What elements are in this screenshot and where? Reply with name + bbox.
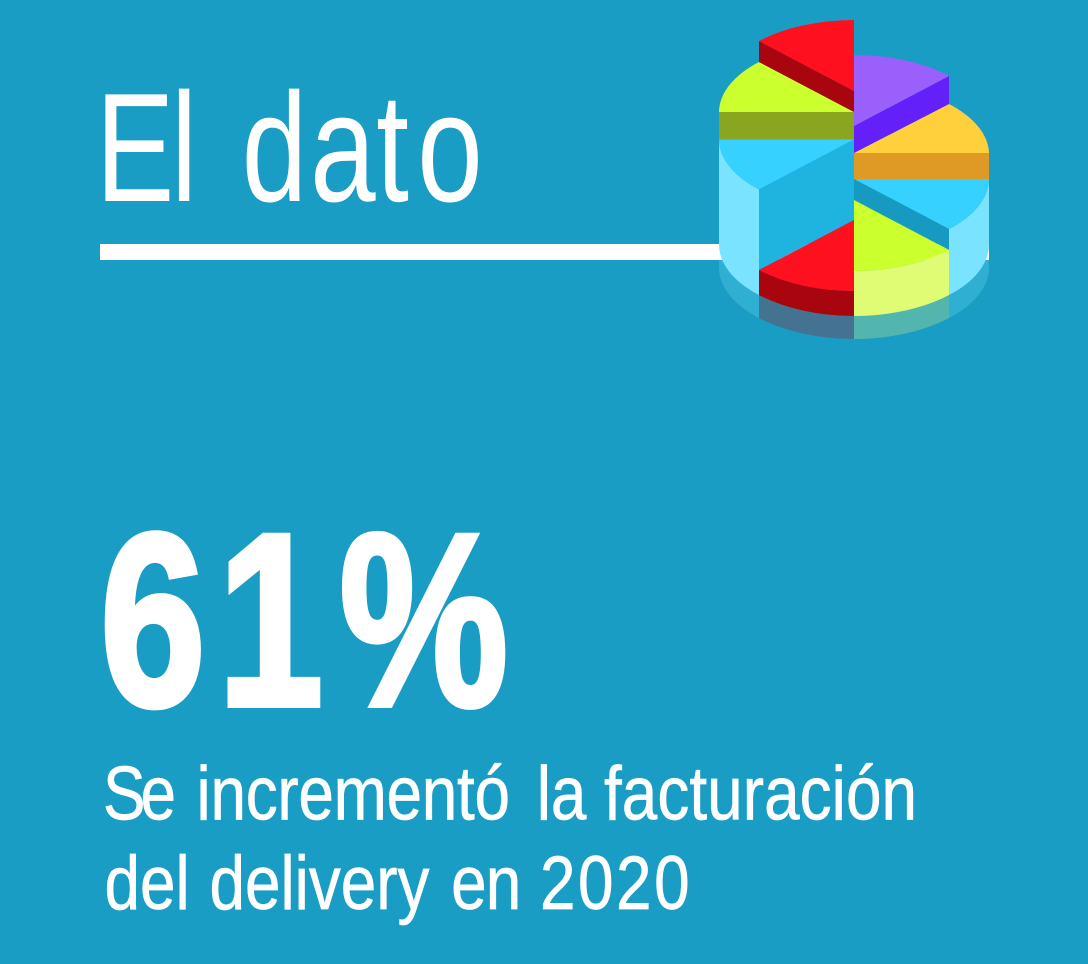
- yellow slice: [854, 104, 989, 179]
- icon: exploded 3D pie chart: [719, 20, 989, 339]
- red slice, top: [759, 20, 854, 112]
- translucent cyan slice, right: [854, 179, 989, 295]
- pie reflection: [719, 260, 989, 339]
- description line 1: Se: [103, 750, 173, 836]
- description line 1: facturación: [604, 750, 917, 836]
- title underline: [100, 244, 989, 260]
- big number: 61%: [100, 482, 508, 758]
- red slice, bottom: [759, 220, 854, 316]
- title: El dato: [96, 61, 483, 235]
- purple slice: [854, 55, 949, 153]
- lime slice, bottom: [854, 200, 949, 316]
- description line 1: incrementó: [197, 750, 510, 836]
- description line 2: del: [104, 840, 190, 925]
- description line 2: 2020: [540, 840, 692, 925]
- translucent cyan slice, left: [719, 140, 854, 295]
- description line 1: la: [537, 750, 587, 836]
- description text: [103, 750, 917, 925]
- description line 2: delivery: [209, 840, 429, 925]
- lime slice, top: [719, 62, 854, 140]
- description line 2: en: [451, 840, 520, 925]
